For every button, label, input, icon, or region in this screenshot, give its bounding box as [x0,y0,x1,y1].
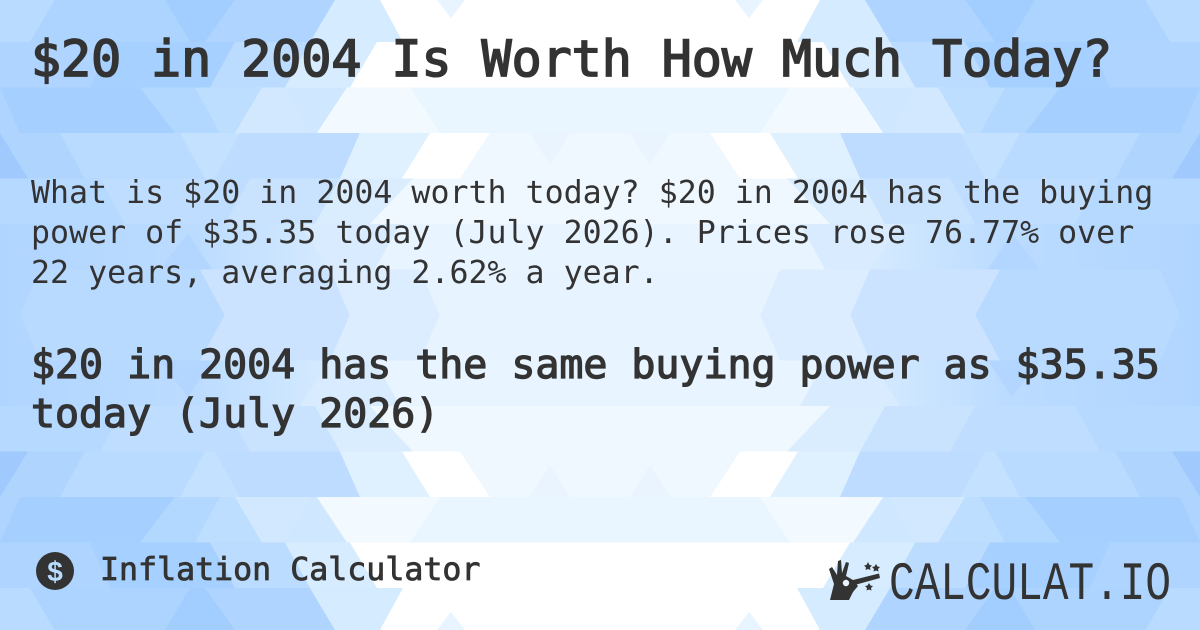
heading: buying power statement: today (July 2026) [31,391,439,437]
icon: dollar coin [36,552,74,590]
heading: buying power statement: $20 in 2004 has the same buying power as $35.35 [31,342,1160,388]
icon: dollar coin: $ [47,556,63,587]
logo: Calculat.io [829,555,1171,616]
title: $20 in 2004 Is Worth How Much Today? [31,30,1112,88]
icon: hand with magic wand [829,560,880,600]
text block: description: 22 years, averaging 2.62% a year. [31,255,659,291]
text block: description: What is $20 in 2004 worth today? $20 in 2004 has the buying [31,175,1153,211]
text block: description: power of $35.35 today (July 2026). Prices rose 76.77% over [31,215,1134,251]
label: Inflation Calculator: Inflation Calculator [100,552,480,588]
